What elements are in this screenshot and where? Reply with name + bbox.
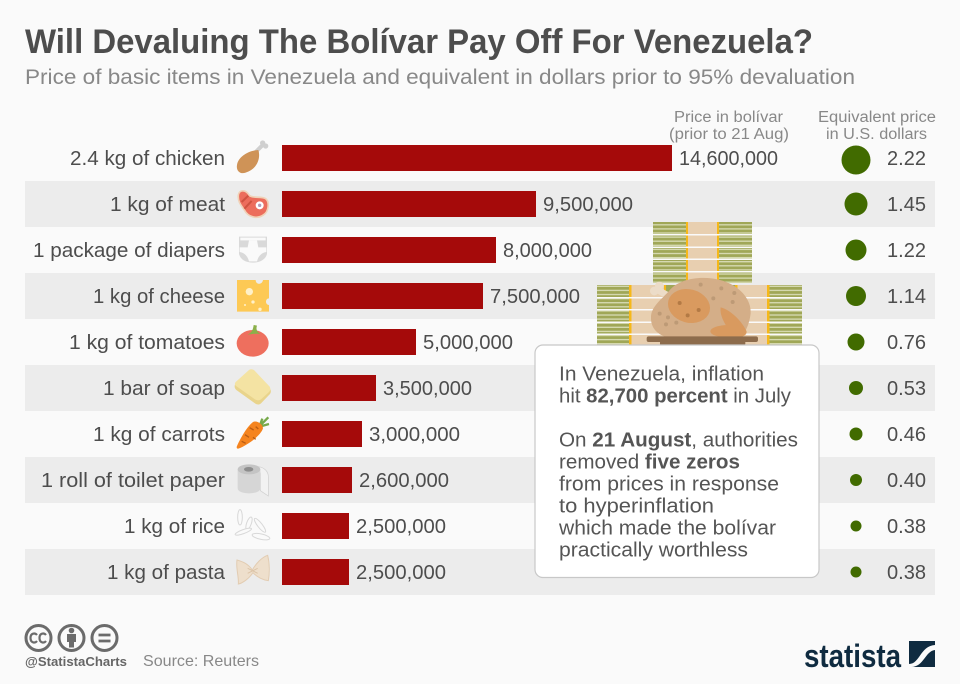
illustration: roast turkey (647, 278, 758, 345)
row: diapers: 8,000,000 (503, 240, 592, 262)
callout box: On 21 August, authorities (559, 430, 798, 452)
row: diapers: 1.22 (887, 240, 926, 262)
row: soap: 0.53 (887, 378, 926, 400)
icon: meat (238, 191, 268, 217)
dot: diapers (846, 240, 866, 260)
row: chicken (70, 140, 926, 174)
row: chicken: 2.22 (887, 148, 926, 170)
column header: price in bolívar (669, 109, 789, 143)
row: toilet paper: 0.40 (887, 470, 926, 492)
column header: equivalent price in U.S. dollars (818, 109, 936, 143)
icon: diaper (239, 237, 267, 263)
callout box: practically worthless (559, 540, 748, 562)
icon: rice grains (235, 510, 270, 541)
callout box: to hyperinflation (559, 496, 714, 518)
column header: equivalent price in U.S. dollars: in U.S. dollars (826, 126, 927, 143)
row: tomatoes: 0.76 (887, 332, 926, 354)
dot: soap (849, 381, 863, 395)
subtitle: Price of basic items in Venezuela and equivalent in dollars prior to 95% devaluation (25, 65, 855, 89)
icon: carrot (237, 417, 269, 449)
bar: meat (282, 191, 536, 217)
row: chicken: 2.4 kg of chicken (70, 148, 225, 170)
row: carrots (93, 417, 926, 449)
row: pasta: 2,500,000 (356, 562, 446, 584)
bar: carrots (282, 421, 362, 447)
row: carrots: 3,000,000 (369, 424, 460, 446)
row: pasta (25, 549, 935, 595)
icon: soap (235, 369, 271, 404)
social handle: @StatistaCharts (25, 655, 127, 669)
row: toilet paper: 1 roll of toilet paper (41, 470, 225, 492)
icon: toilet paper (238, 464, 268, 496)
callout box: removed five zeros (559, 452, 740, 474)
dot: meat (844, 192, 868, 216)
dot: tomatoes (848, 334, 864, 350)
row: carrots: 0.46 (887, 424, 926, 446)
row: tomatoes: 1 kg of tomatoes (69, 332, 225, 354)
row: diapers: 1 package of diapers (33, 240, 225, 262)
row: cheese: 1 kg of cheese (93, 286, 225, 308)
bar: tomatoes (282, 329, 416, 355)
bar: chicken (282, 145, 672, 171)
dot: toilet paper (850, 474, 862, 486)
icons: creative commons licence (26, 626, 117, 650)
dot: pasta (850, 566, 862, 578)
icon: farfalle pasta (237, 555, 269, 584)
column header: price in bolívar: Price in bolívar (674, 109, 783, 126)
bar: soap (282, 375, 376, 401)
row: soap (25, 365, 935, 411)
callout box: In Venezuela, inflation (559, 364, 764, 386)
row: soap: 1 bar of soap (103, 378, 225, 400)
row: tomatoes (69, 325, 926, 357)
illustration: money stacks (597, 222, 802, 345)
dot: cheese (846, 286, 866, 306)
row: cheese: 1.14 (887, 286, 926, 308)
dot: rice (850, 520, 862, 532)
row: soap: 3,500,000 (383, 378, 472, 400)
row: rice: 1 kg of rice (124, 516, 225, 538)
row: meat: 9,500,000 (543, 194, 633, 216)
bar: pasta (282, 559, 349, 585)
statista logo: statista (804, 638, 901, 674)
column header: price in bolívar: (prior to 21 Aug) (669, 126, 789, 143)
row: rice: 0.38 (887, 516, 926, 538)
bar: toilet paper (282, 467, 352, 493)
icon: cheese (237, 280, 269, 312)
source: Source: Reuters (143, 653, 259, 670)
row: tomatoes: 5,000,000 (423, 332, 513, 354)
icon: tomato (237, 325, 269, 357)
title: Will Devaluing The Bolívar Pay Off For Venezuela? (25, 23, 813, 61)
callout box: hit 82,700 percent in July (559, 386, 791, 408)
bar: cheese (282, 283, 483, 309)
callout box (535, 345, 819, 578)
column header: equivalent price in U.S. dollars: Equivalent price (818, 109, 936, 126)
row: cheese: 7,500,000 (490, 286, 580, 308)
row: diapers (33, 237, 926, 263)
row: rice (124, 510, 926, 541)
bar: diapers (282, 237, 496, 263)
row: pasta: 0.38 (887, 562, 926, 584)
bar: rice (282, 513, 349, 539)
row: toilet paper: 2,600,000 (359, 470, 449, 492)
icon: chicken leg (237, 140, 268, 173)
row: meat (25, 181, 935, 227)
row: chicken: 14,600,000 (679, 148, 778, 170)
row: pasta: 1 kg of pasta (107, 562, 226, 584)
row: toilet paper (25, 457, 935, 503)
dot: carrots (850, 428, 862, 440)
row: carrots: 1 kg of carrots (93, 424, 225, 446)
icon: statista mark (909, 641, 935, 667)
row: meat: 1 kg of meat (110, 194, 225, 216)
dot: chicken (842, 146, 870, 174)
callout box: which made the bolívar (558, 518, 776, 540)
row: cheese (25, 273, 935, 319)
row: meat: 1.45 (887, 194, 926, 216)
row: rice: 2,500,000 (356, 516, 446, 538)
callout box: from prices in response (559, 474, 779, 496)
